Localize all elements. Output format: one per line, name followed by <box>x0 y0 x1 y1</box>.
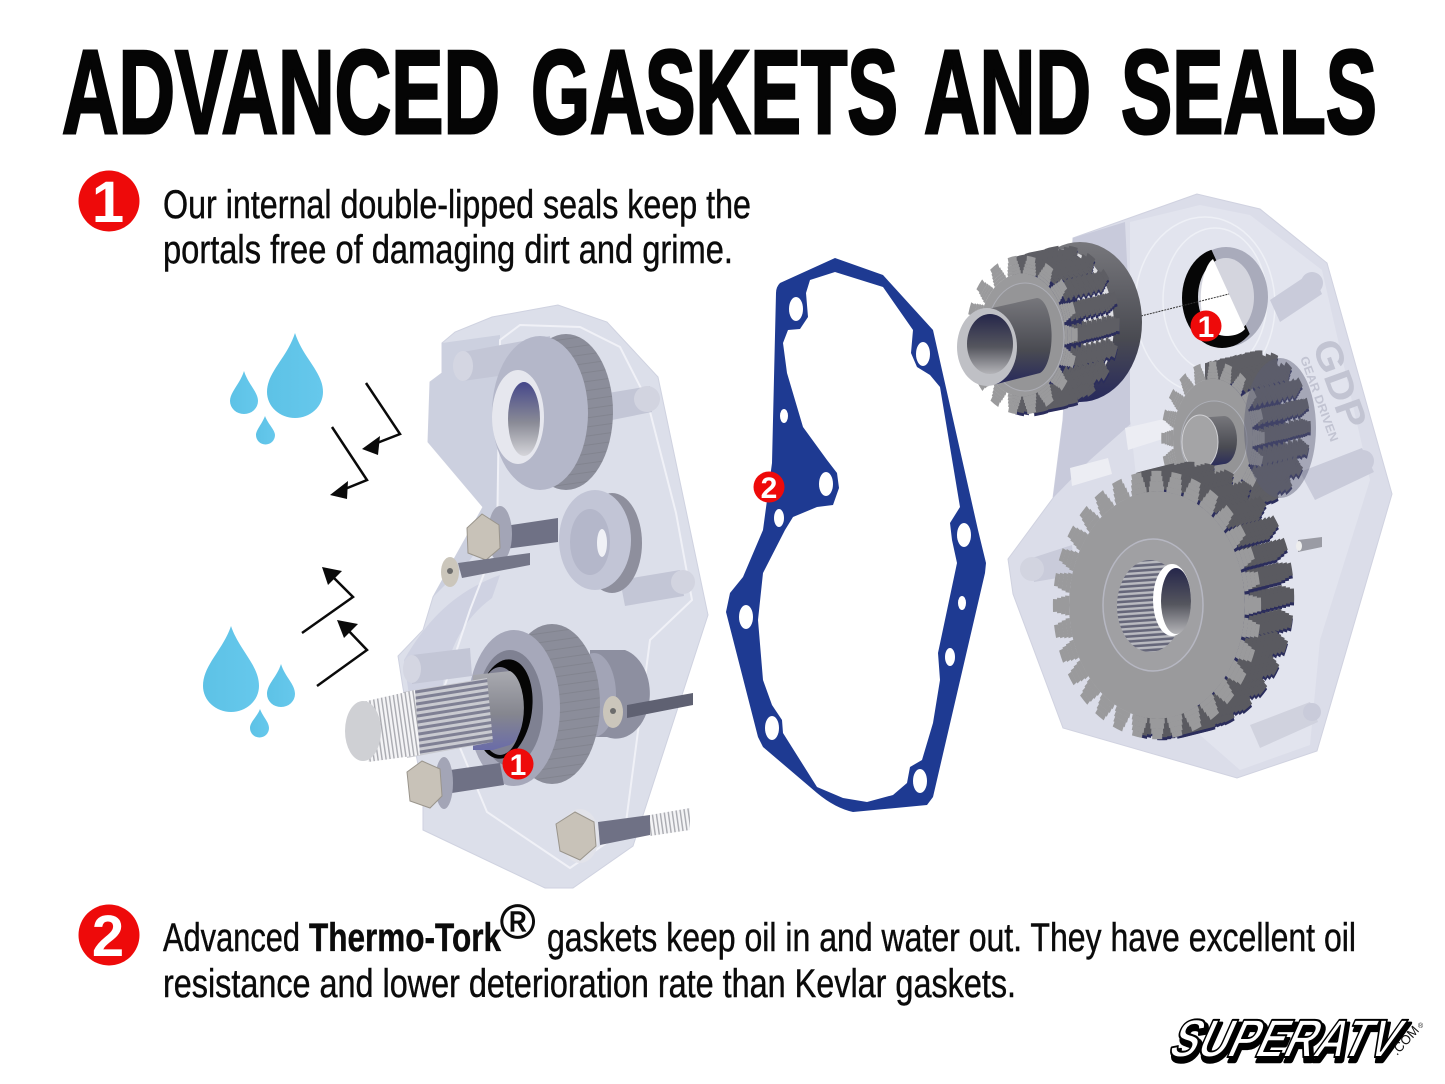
title: AND <box>924 26 1091 159</box>
translucent rear bearing <box>1244 358 1316 498</box>
gear collar <box>1018 242 1142 402</box>
logo watermark: GDP <box>1304 334 1374 435</box>
title: ADVANCED <box>62 26 500 159</box>
text block: seal description: portals free of damaging dirt and grime. <box>163 228 733 272</box>
pins in housing <box>1020 272 1374 748</box>
text block: gasket description: resistance and lower deterioration rate than Kevlar gaskets. <box>163 962 1016 1006</box>
right housing assembly <box>957 194 1392 778</box>
seat rings <box>1135 217 1275 393</box>
icon: water drops upper <box>230 333 323 444</box>
darker overlap plate <box>428 335 500 597</box>
text block: gasket description: ® <box>500 896 535 949</box>
gasket holes <box>739 297 971 793</box>
text block: gasket description: Thermo-Tork <box>309 916 502 960</box>
badge: callout 1 on seal <box>502 748 534 782</box>
bolt bottom <box>556 808 690 863</box>
seal ring <box>1141 247 1268 348</box>
text block: seal description: Our internal double-lipped seals keep the <box>163 183 751 227</box>
small gear <box>1163 353 1316 514</box>
gasket <box>726 258 986 812</box>
badge: callout 1 on seal: 1 <box>510 749 526 782</box>
housing body right <box>1008 194 1392 778</box>
large seal hub <box>468 624 600 786</box>
badge: number 1 <box>78 170 140 235</box>
large gear <box>1055 464 1292 738</box>
darker overlap plate <box>1053 222 1135 498</box>
bearing middle <box>559 490 642 593</box>
badge: number 1: 1 <box>92 170 124 235</box>
screw rear <box>603 693 693 728</box>
inner contour line <box>440 325 692 868</box>
logo watermark: GEAR DRIVEN <box>1297 354 1341 444</box>
badge: callout 2 on gasket <box>754 472 784 505</box>
gear hub <box>1103 539 1203 671</box>
badge: callout 1 on ring: 1 <box>1198 311 1214 344</box>
badge: number 2 <box>78 904 140 969</box>
title <box>62 26 1377 159</box>
bolt lower left <box>407 757 504 809</box>
top gear with shaft <box>957 242 1142 414</box>
black seal ring <box>469 656 539 762</box>
pins in housing <box>403 336 695 684</box>
bolt upper <box>467 506 558 562</box>
icon: water drops lower <box>203 626 295 738</box>
text block: seal description <box>163 183 751 272</box>
title: GASKETS <box>531 26 898 159</box>
screw upper <box>441 553 530 587</box>
badge: callout 1 on ring <box>1190 310 1222 344</box>
logo: SuperATV: ® <box>1418 1022 1424 1030</box>
text block: gasket description <box>163 896 1356 1006</box>
logo: SuperATV: .COM <box>1388 1023 1422 1058</box>
rear small bearing <box>572 650 650 739</box>
bearing upper <box>492 334 613 490</box>
pin <box>1296 537 1322 552</box>
left housing assembly <box>345 305 708 888</box>
badge: number 2: 2 <box>92 904 124 969</box>
shaft <box>983 298 1052 385</box>
arrows: water deflected <box>302 383 400 686</box>
output shaft <box>345 671 524 762</box>
text block: gasket description: Advanced <box>163 916 300 960</box>
badge: callout 2 on gasket: 2 <box>761 472 777 505</box>
housing body left <box>398 305 708 888</box>
